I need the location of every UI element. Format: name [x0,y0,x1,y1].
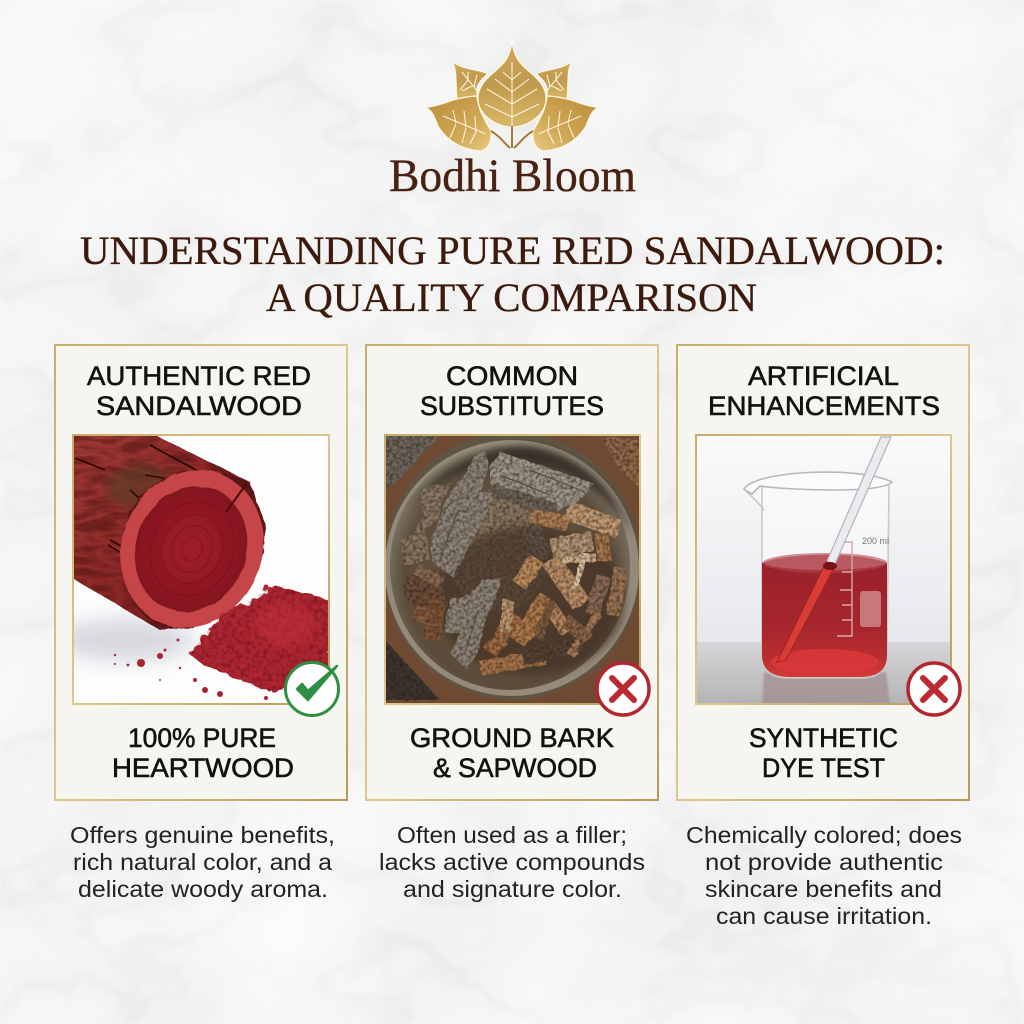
icon: red cross badge [908,663,960,715]
heading [420,361,604,421]
heading: COMMON [446,361,578,391]
text block: authentic description [70,822,335,902]
subheading [112,723,294,783]
subheading: HEARTWOOD [112,753,294,783]
photo: bowl of bark and sapwood [383,432,641,704]
panel card [677,345,969,800]
text block: authentic description: Offers genuine benefits, [70,822,335,848]
photo: log and powder [55,435,330,704]
heading [708,361,940,421]
subheading [410,723,614,783]
leaf veins [443,62,581,144]
subheading: DYE TEST [762,753,885,783]
heading [87,361,311,421]
title: UNDERSTANDING PURE RED SANDALWOOD: [80,228,945,273]
text block: substitutes description: and signature color. [403,876,622,902]
text block: enhancements description: skincare benefits and [705,876,942,902]
panel: authentic red sandalwood [55,345,347,800]
subheading: 100% PURE [128,723,276,753]
logo: Bodhi Bloom [389,40,636,202]
panel card [366,345,658,800]
text block: authentic description: rich natural color, and a [73,849,332,875]
heading: SUBSTITUTES [420,391,604,421]
leaf stems [491,126,533,148]
heading: ENHANCEMENTS [708,391,940,421]
text block: authentic description: delicate woody aroma. [78,876,328,902]
icon: golden bodhi leaves [425,40,599,151]
heading: ARTIFICIAL [748,361,899,391]
panel: artificial enhancements [677,345,969,800]
wordmark: Bodhi Bloom [389,150,636,202]
text block: enhancements description: not provide authentic [705,849,943,875]
subheading: GROUND BARK [410,723,614,753]
text block: substitutes description: Often used as a filler; [397,822,627,848]
photo: beaker of red dye: 200 ml [862,536,889,546]
heading: SANDALWOOD [96,391,302,421]
text block: substitutes description [379,822,645,902]
heading: AUTHENTIC RED [87,361,311,391]
icon: red cross badge [597,663,649,715]
dark chips bed [435,525,625,675]
text block: enhancements description [686,822,962,929]
subheading: & SAPWOOD [433,753,597,783]
text block: enhancements description: Chemically colored; does [686,822,962,848]
subheading: SYNTHETIC [749,723,898,753]
icon: green check badge [286,662,338,716]
text block: substitutes description: lacks active compounds [379,849,645,875]
title: A QUALITY COMPARISON [266,275,757,320]
subheading [749,723,898,783]
photo: beaker of red dye [696,435,951,704]
title [80,228,945,320]
panel: common substitutes [366,345,658,800]
panel card [55,345,347,800]
text block: enhancements description: can cause irritation. [716,903,932,929]
